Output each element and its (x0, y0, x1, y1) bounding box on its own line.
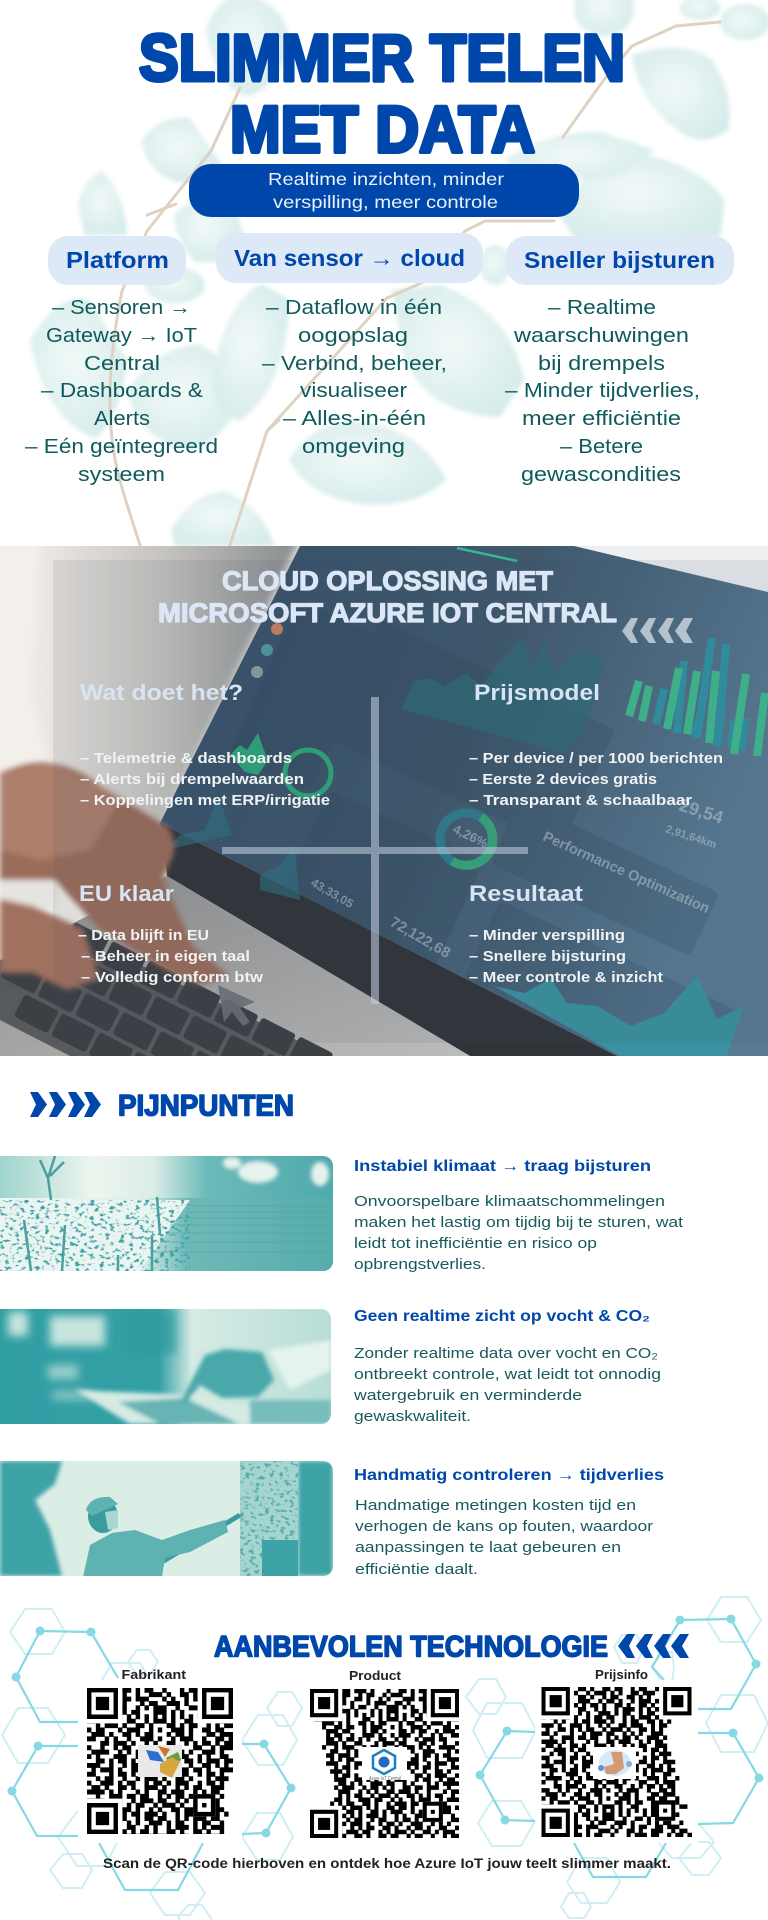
text block: instabiel klimaat: maken het lastig om tijdig bij te sturen, wat (354, 1214, 684, 1231)
qr panel: prijsinfo: Prijsinfo (595, 1668, 648, 1682)
block: wat doet het: – Telemetrie & dashboards (80, 750, 292, 767)
panel: platform: Platform (66, 247, 169, 273)
donut on screen (440, 813, 493, 865)
text block: handmatig controleren: verhogen de kans op fouten, waardoor (355, 1518, 653, 1535)
panel: laptop photo background: Performance Optimization (540, 829, 712, 917)
text block: handmatig controleren: Handmatig controleren → tijdverlies (354, 1467, 664, 1484)
panel: platform (25, 236, 218, 486)
block: prijsmodel (469, 680, 723, 809)
icon: right chevrons (30, 1092, 101, 1117)
text block: handmatig controleren: efficiëntie daalt. (355, 1561, 478, 1578)
text block: instabiel klimaat: leidt tot inefficiëntie en risico op (354, 1235, 597, 1252)
heading: aanbevolen technologie: AANBEVOLEN TECHNOLOGIE (214, 1630, 608, 1664)
panel: sneller bijsturen: – Betere (560, 435, 643, 458)
title: SLIMMER TELEN (139, 20, 625, 94)
panel: van sensor naar cloud: Van sensor → cloud (234, 245, 465, 271)
block: eu klaar: – Beheer in eigen taal (81, 948, 250, 965)
icon: azure iot logo: Azure IoT Central (369, 1776, 401, 1782)
panel: laptop photo background: 72,122,68 (387, 914, 453, 962)
panel: sneller bijsturen: – Realtime (548, 296, 656, 319)
block: resultaat (469, 881, 663, 986)
block: resultaat: – Snellere bijsturing (469, 948, 626, 965)
heading: cloud oplossing: CLOUD OPLOSSING MET (222, 566, 554, 596)
panel: platform: Central (84, 352, 160, 375)
panel: laptop photo background: 4,26% (451, 821, 491, 851)
icon: azure iot logo (362, 1747, 407, 1782)
panel: platform: Alerts (94, 407, 150, 430)
photo: hand on tablet (0, 1309, 331, 1424)
text block: instabiel klimaat: Onvoorspelbare klimaatschommelingen (354, 1193, 665, 1210)
subtitle pill: verspilling, meer controle (273, 192, 498, 212)
panel: laptop photo background (0, 546, 768, 1056)
eucalyptus background (30, 0, 768, 546)
text block: instabiel klimaat: opbrengstverlies. (354, 1256, 486, 1273)
block: prijsmodel: – Eerste 2 devices gratis (469, 771, 657, 788)
block: wat doet het: Wat doet het? (80, 680, 243, 705)
panel: van sensor naar cloud: – Alles-in-één (283, 407, 426, 430)
cross divider (222, 697, 528, 1004)
panel: platform: – Eén geïntegreerd (25, 435, 218, 458)
panel: sneller bijsturen: Sneller bijsturen (524, 247, 715, 273)
panel: platform: systeem (78, 463, 165, 486)
text block: handmatig controleren: Handmatige metingen kosten tijd en (355, 1497, 636, 1514)
panel: laptop photo background: 2,91,64km (664, 823, 718, 851)
panel: sneller bijsturen: – Minder tijdverlies, (505, 379, 700, 402)
block: resultaat: – Minder verspilling (469, 927, 625, 944)
small green chart (230, 733, 331, 796)
text block: geen realtime zicht: gewaskwaliteit. (354, 1408, 471, 1425)
icon: left chevrons (622, 618, 693, 643)
block: eu klaar: – Volledig conform btw (81, 969, 263, 986)
heading: pijnpunten: PIJNPUNTEN (118, 1090, 294, 1122)
block: resultaat: – Meer controle & inzicht (469, 969, 663, 986)
panel: sneller bijsturen: bij drempels (538, 352, 665, 375)
panel: van sensor naar cloud: visualiseer (300, 379, 407, 402)
area chart on screen (401, 636, 604, 753)
panel: van sensor naar cloud: – Verbind, beheer, (262, 352, 447, 375)
hexagon network background (2, 1597, 768, 1920)
panel: van sensor naar cloud: omgeving (302, 435, 405, 458)
text block: geen realtime zicht: watergebruik en verminderde (353, 1387, 582, 1404)
subtitle pill: Realtime inzichten, minder (268, 169, 504, 189)
icon: prijsinfo logo (593, 1747, 636, 1779)
panel: laptop photo background: 43,33,05 (308, 875, 356, 911)
panel: laptop photo background: 29,54 (677, 795, 726, 828)
block: prijsmodel: Prijsmodel (474, 680, 600, 705)
panel: platform: Gateway → IoT (46, 324, 197, 347)
photo: farmer (0, 1461, 333, 1577)
qr panel: fabrikant (78, 1668, 260, 1849)
text block: geen realtime zicht (353, 1308, 661, 1425)
qr panel: fabrikant: Fabrikant (122, 1668, 187, 1682)
caption: Scan de QR-code hierboven en ontdek hoe Azure IoT jouw teelt slimmer maakt. (103, 1856, 671, 1871)
panel: sneller bijsturen: meer efficiëntie (522, 407, 681, 430)
panel: platform: – Sensoren → (52, 296, 191, 319)
heading: cloud oplossing (158, 566, 617, 628)
text block: instabiel klimaat (354, 1158, 684, 1273)
subtitle pill (189, 164, 579, 217)
block: resultaat: Resultaat (469, 881, 584, 906)
title: MET DATA (230, 92, 535, 166)
block: wat doet het: – Alerts bij drempelwaarden (80, 771, 304, 788)
text block: handmatig controleren: aanpassingen te laat gebeuren en (355, 1539, 621, 1556)
small peaks (172, 796, 232, 848)
block: wat doet het: – Koppelingen met ERP/irrigatie (80, 792, 330, 809)
panel: van sensor naar cloud: oogopslag (298, 324, 408, 347)
screen sidebar items (251, 548, 517, 678)
title (139, 20, 625, 166)
panel: sneller bijsturen: gewascondities (521, 463, 681, 486)
hand on keyboard (0, 762, 230, 990)
block: prijsmodel: – Per device / per 1000 berichten (469, 750, 723, 767)
panel: sneller bijsturen (505, 236, 734, 486)
text block: geen realtime zicht: ontbreekt controle, wat leidt tot onnodig (354, 1366, 661, 1383)
qr panel: prijsinfo (535, 1668, 700, 1843)
text block: handmatig controleren (354, 1467, 664, 1578)
icon: fabrikant logo (138, 1745, 182, 1778)
block: eu klaar (78, 881, 263, 986)
text block: geen realtime zicht: Geen realtime zicht op vocht & CO₂ (354, 1308, 650, 1325)
qr panel: product (302, 1669, 463, 1843)
panel: platform: – Dashboards & (41, 379, 203, 402)
photo: dry field (0, 1156, 333, 1271)
heading: cloud oplossing: MICROSOFT AZURE IOT CENTRAL (158, 598, 617, 628)
icon: bar chart on screen (629, 638, 765, 756)
icon: cursor (218, 985, 255, 1026)
block: eu klaar: – Data blijft in EU (78, 927, 209, 944)
text block: geen realtime zicht: Zonder realtime data over vocht en CO₂ (354, 1345, 658, 1362)
panel: van sensor naar cloud (216, 233, 483, 458)
teal area chart bottom (494, 976, 744, 1056)
text block: instabiel klimaat: Instabiel klimaat → traag bijsturen (354, 1158, 651, 1175)
panel: sneller bijsturen: waarschuwingen (513, 324, 689, 347)
block: wat doet het (80, 680, 330, 809)
panel: van sensor naar cloud: – Dataflow in één (266, 296, 442, 319)
qr panel: product: Product (349, 1669, 402, 1683)
translucent panel (53, 560, 768, 1043)
icon: left chevrons blue (618, 1634, 689, 1658)
block: eu klaar: EU klaar (79, 881, 174, 906)
block: prijsmodel: – Transparant & schaalbaar (469, 792, 692, 809)
